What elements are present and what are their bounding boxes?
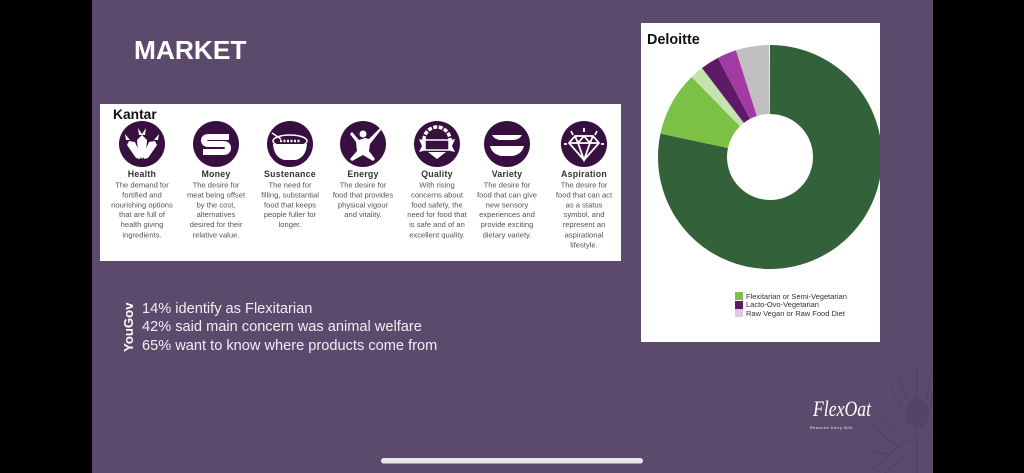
- donut chart: [692, 80, 848, 234]
- Health column: nourishing options: [111, 200, 173, 210]
- Variety column: Variety: [492, 169, 522, 179]
- chart legend: Lacto-Ovo-Vegetarian: [746, 300, 819, 309]
- Quality column: [407, 121, 468, 240]
- panel: Deloitte: [641, 23, 880, 342]
- Sustenance column: filling, substantial: [261, 190, 319, 200]
- Quality column: With rising: [419, 180, 455, 190]
- YouGov statistics: [142, 301, 437, 354]
- Sustenance column: Sustenance: [264, 169, 316, 179]
- Money column: The desire for: [193, 180, 240, 190]
- Health column: ingredients.: [122, 230, 162, 240]
- panel: Kantar: [100, 104, 621, 261]
- Aspiration column: The desire for: [561, 180, 608, 190]
- Money column: desired for their: [190, 220, 243, 229]
- Sustenance column: people fuller for: [264, 210, 317, 219]
- Aspiration column: symbol, and: [564, 210, 604, 219]
- chart legend: Flexitarian or Semi-Vegetarian: [746, 292, 847, 301]
- Energy column: physical vigour: [338, 200, 389, 210]
- chart legend: Raw Vegan or Raw Food Diet: [746, 309, 846, 318]
- chart legend: [735, 292, 847, 318]
- Deloitte heading: Deloitte: [647, 32, 700, 48]
- Aspiration column: as a status: [566, 200, 603, 210]
- Kantar heading: Kantar: [113, 107, 157, 122]
- FlexOat logo: FlexOat: [812, 396, 872, 421]
- Health column: [111, 121, 173, 240]
- Aspiration column: [556, 121, 613, 250]
- Quality column: is safe and of an: [409, 220, 465, 229]
- FlexOat logo: Reduced Dairy Milk: [810, 426, 853, 430]
- Health column: Health: [128, 169, 156, 179]
- home indicator bar: [381, 458, 643, 464]
- Variety column: experiences and: [479, 210, 535, 219]
- YouGov statistics: 42% said main concern was animal welfare: [142, 319, 422, 335]
- Health column: fortified and: [122, 190, 162, 200]
- YouGov statistics: 14% identify as Flexitarian: [142, 301, 312, 317]
- Money column: [187, 121, 246, 240]
- Energy column: food that provides: [333, 190, 393, 200]
- Quality column: need for food that: [407, 210, 468, 219]
- Variety column: provide exciting: [481, 220, 533, 229]
- Quality column: Quality: [421, 169, 453, 179]
- Variety column: new sensory: [486, 200, 529, 210]
- title: MARKET: [134, 35, 246, 65]
- Aspiration column: aspirational: [565, 230, 604, 240]
- Variety column: [477, 121, 537, 240]
- Quality column: excellent quality.: [409, 230, 465, 240]
- YouGov rotated label: YouGov: [121, 302, 136, 352]
- Sustenance column: food that keeps: [264, 200, 316, 210]
- Sustenance column: The need for: [268, 180, 312, 190]
- Energy column: and vitality.: [344, 210, 382, 219]
- Aspiration column: lifestyle.: [570, 240, 598, 250]
- Health column: that are full of: [119, 210, 166, 219]
- Sustenance column: [261, 121, 319, 229]
- Aspiration column: food that can act: [556, 190, 613, 200]
- Money column: alternatives: [197, 210, 236, 219]
- Health column: health giving: [121, 220, 163, 229]
- FlexOat logo: [810, 396, 872, 430]
- Energy column: Energy: [347, 169, 379, 179]
- Money column: meat being offset: [187, 190, 246, 200]
- Health column: The demand for: [115, 180, 169, 190]
- Variety column: food that can give: [477, 190, 537, 200]
- Sustenance column: longer.: [279, 220, 301, 229]
- Money column: by the cost,: [197, 200, 235, 210]
- Variety column: dietary variety.: [483, 230, 531, 240]
- Aspiration column: represent an: [563, 220, 605, 229]
- Energy column: The desire for: [340, 180, 387, 190]
- YouGov statistics: 65% want to know where products come from: [142, 338, 437, 354]
- Aspiration column: Aspiration: [561, 169, 607, 179]
- Money column: Money: [201, 169, 231, 179]
- decorative thistle: [872, 366, 933, 473]
- Money column: relative value.: [193, 230, 239, 240]
- Quality column: concerns about: [411, 190, 464, 200]
- Variety column: The desire for: [484, 180, 531, 190]
- Quality column: food safety, the: [411, 200, 463, 210]
- Energy column: [333, 121, 393, 219]
